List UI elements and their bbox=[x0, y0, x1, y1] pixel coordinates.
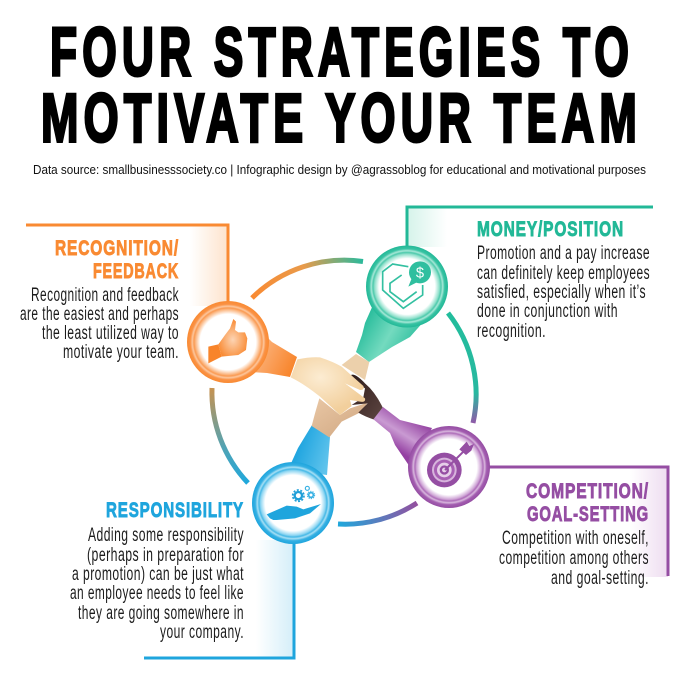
icon: shield and dollar bubble bbox=[383, 261, 431, 308]
icon: shield and dollar bubble: $ bbox=[416, 266, 424, 282]
body: the least utilized way to bbox=[42, 323, 179, 344]
clasped hands and sleeves bbox=[250, 305, 432, 475]
purple sleeve bbox=[373, 407, 432, 470]
green sleeve bbox=[356, 305, 425, 362]
heading bbox=[55, 236, 179, 283]
tan arm under bbox=[342, 354, 369, 380]
blue-sleeve arm bbox=[312, 398, 367, 437]
green circle bbox=[366, 246, 448, 328]
body bbox=[70, 525, 244, 643]
body: Adding some responsibility bbox=[88, 525, 244, 546]
heading bbox=[526, 479, 649, 526]
purple circle bbox=[408, 426, 490, 508]
blue circle bbox=[252, 462, 334, 544]
body: (perhaps in preparation for bbox=[87, 545, 244, 566]
body: they are going somewhere in bbox=[78, 603, 244, 624]
body: an employee needs to feel like bbox=[70, 583, 244, 604]
text: recognition bbox=[20, 236, 179, 363]
dark hand bbox=[351, 375, 383, 419]
orange circle bbox=[187, 301, 269, 383]
body: motivate your team. bbox=[63, 342, 179, 363]
heading: FEEDBACK bbox=[93, 259, 179, 283]
orange sleeve bbox=[250, 332, 297, 377]
body: a promotion) can be just what bbox=[72, 564, 244, 585]
heading: MONEY/POSITION bbox=[477, 217, 624, 241]
heading: RECOGNITION/ bbox=[55, 236, 179, 260]
text: responsibility bbox=[70, 498, 244, 643]
body: are the easiest and perhaps bbox=[20, 304, 179, 325]
title bbox=[41, 14, 642, 156]
body: your company. bbox=[160, 622, 244, 643]
icon: thumbs up bbox=[208, 319, 247, 363]
body bbox=[499, 528, 649, 589]
body bbox=[477, 243, 650, 342]
body: Recognition and feedback bbox=[31, 285, 179, 306]
body: recognition. bbox=[477, 321, 546, 342]
blue sleeve bbox=[288, 425, 330, 475]
data source line: Data source: smallbusinesssociety.co | Infographic design by @agrassoblog for educational and motivational purposes bbox=[33, 163, 646, 177]
light hand bbox=[291, 357, 365, 415]
heading: RESPONSIBILITY bbox=[106, 498, 244, 522]
ring of arcs bbox=[212, 260, 476, 524]
text: competition bbox=[499, 479, 649, 589]
panel: competition frame bbox=[486, 467, 668, 577]
icon: target and arrow bbox=[427, 442, 474, 487]
text: money bbox=[477, 217, 650, 342]
panel: responsibility frame bbox=[144, 540, 294, 658]
body bbox=[20, 285, 179, 363]
panel: money frame bbox=[407, 207, 653, 248]
icon: hand holding gears bbox=[267, 486, 321, 520]
panel: recognition frame bbox=[26, 225, 228, 306]
